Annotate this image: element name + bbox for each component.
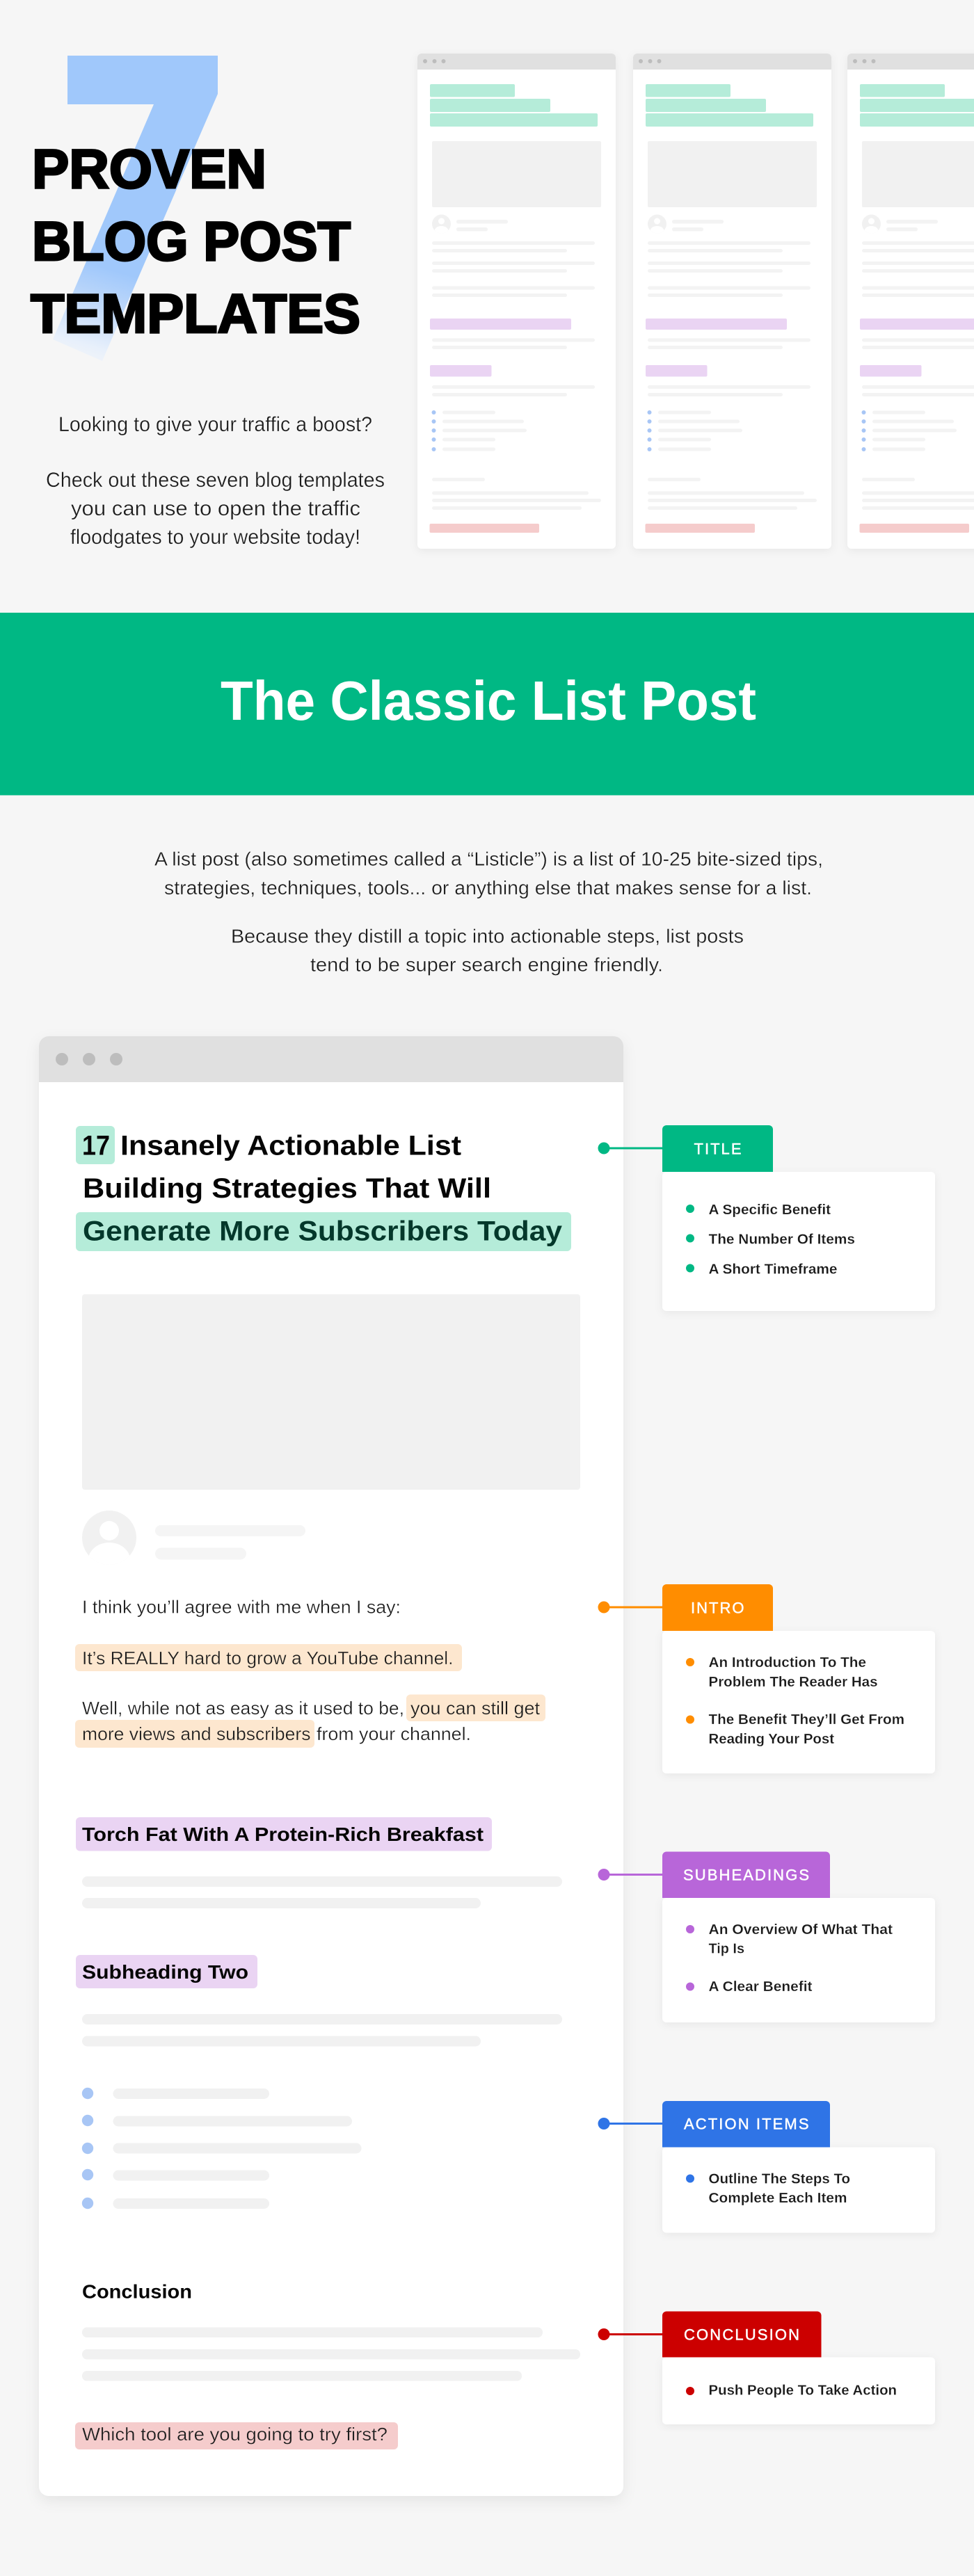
- list: action item points: [686, 2171, 850, 2206]
- post title: Insanely Actionable List: [120, 1131, 461, 1161]
- text block: list post description: strategies, techniques, tools... or anything else that makes sense for a list.: [164, 877, 812, 899]
- callout: title: [598, 1125, 935, 1311]
- list: title points: The Number Of Items: [708, 1232, 855, 1248]
- list: subheading points: An Overview Of What That: [708, 1922, 893, 1938]
- text block: list post description: A list post (also sometimes called a “Listicle”) is a list of 10-25 bite-sized tips,: [154, 848, 823, 869]
- intro copy: I think you’ll agree with me when I say:: [82, 1597, 401, 1618]
- list: conclusion points: Push People To Take Action: [708, 2383, 897, 2398]
- body line placeholders: [82, 2014, 562, 2046]
- post title: 17: [82, 1131, 110, 1161]
- list: intro points: An Introduction To The: [708, 1655, 866, 1671]
- subheading two: [76, 1955, 257, 1988]
- subheading one: Torch Fat With A Protein-Rich Breakfast: [82, 1824, 484, 1845]
- list: action item points: Outline The Steps To: [708, 2171, 850, 2187]
- author avatar: [82, 1511, 136, 1555]
- callout: action items: [598, 2101, 935, 2232]
- browser header bar: [39, 1036, 623, 1082]
- intro copy: It’s REALLY hard to grow a YouTube channel.: [82, 1648, 454, 1668]
- body line placeholders: [82, 1876, 562, 1908]
- panel: blog post browser mockup: [39, 1036, 623, 2496]
- intro copy: Well, while not as easy as it used to be,: [82, 1698, 404, 1718]
- text block: list post description: [154, 848, 823, 975]
- list: action item points: Complete Each Item: [708, 2191, 847, 2206]
- title: [31, 138, 360, 344]
- intro text block: Check out these seven blog templates: [46, 469, 385, 492]
- post title: Building Strategies That Will: [83, 1173, 491, 1204]
- intro copy: from your channel.: [317, 1723, 471, 1744]
- call to action highlight: Which tool are you going to try first?: [82, 2424, 388, 2445]
- list: subheading points: Tip Is: [708, 1942, 744, 1957]
- conclusion heading: Conclusion: [82, 2281, 192, 2302]
- list: title points: [686, 1202, 855, 1277]
- panel: blog template thumbnail 1: [417, 54, 616, 549]
- featured image placeholder: [82, 1294, 580, 1490]
- intro text block: you can use to open the traffic: [71, 497, 360, 520]
- icon: large blue number 7: [53, 56, 218, 361]
- conclusion line placeholders: [82, 2327, 580, 2381]
- list: intro points: [686, 1655, 904, 1747]
- callout: action items: ACTION ITEMS: [684, 2116, 808, 2132]
- intro text block: [46, 413, 385, 549]
- intro text block: floodgates to your website today!: [70, 526, 360, 549]
- section band: The Classic List Post: [0, 613, 974, 796]
- list: title points: A Short Timeframe: [708, 1262, 838, 1277]
- heading: The Classic List Post: [221, 670, 756, 732]
- list: intro points: Reading Your Post: [708, 1732, 834, 1747]
- intro copy: more views and subscribers: [82, 1723, 310, 1744]
- post title: Generate More Subscribers Today: [83, 1216, 563, 1246]
- title: TEMPLATES: [31, 282, 360, 344]
- list: title points: A Specific Benefit: [708, 1202, 831, 1218]
- callout: subheadings: [598, 1851, 935, 2022]
- post title: [76, 1126, 571, 1251]
- call to action highlight: [75, 2422, 398, 2449]
- intro text block: Looking to give your traffic a boost?: [58, 413, 372, 436]
- list: intro points: Problem The Reader Has: [708, 1675, 878, 1690]
- bullet list placeholders: [82, 2088, 362, 2209]
- list: intro points: The Benefit They’ll Get From: [708, 1712, 904, 1728]
- list: subheading points: A Clear Benefit: [708, 1979, 813, 1995]
- panel: blog template thumbnail 2: [633, 54, 831, 549]
- callout: conclusion: CONCLUSION: [684, 2326, 799, 2344]
- title: PROVEN: [32, 138, 266, 200]
- author byline placeholders: [155, 1525, 305, 1559]
- intro copy: you can still get: [410, 1698, 541, 1718]
- callout: subheadings: SUBHEADINGS: [683, 1867, 809, 1883]
- callout: intro: INTRO: [691, 1600, 744, 1616]
- title: BLOG POST: [32, 210, 351, 272]
- subheading two: Subheading Two: [82, 1961, 248, 1983]
- subheading one: [76, 1817, 492, 1851]
- panel: blog template thumbnail 3: [847, 54, 974, 549]
- text block: list post description: Because they distill a topic into actionable steps, list posts: [231, 925, 744, 947]
- text block: list post description: tend to be super search engine friendly.: [310, 954, 663, 975]
- list: subheading points: [686, 1922, 893, 1995]
- callout: conclusion: [598, 2312, 935, 2424]
- callout: intro: [598, 1584, 935, 1773]
- intro copy: [75, 1597, 545, 1748]
- callout: title: TITLE: [694, 1141, 742, 1157]
